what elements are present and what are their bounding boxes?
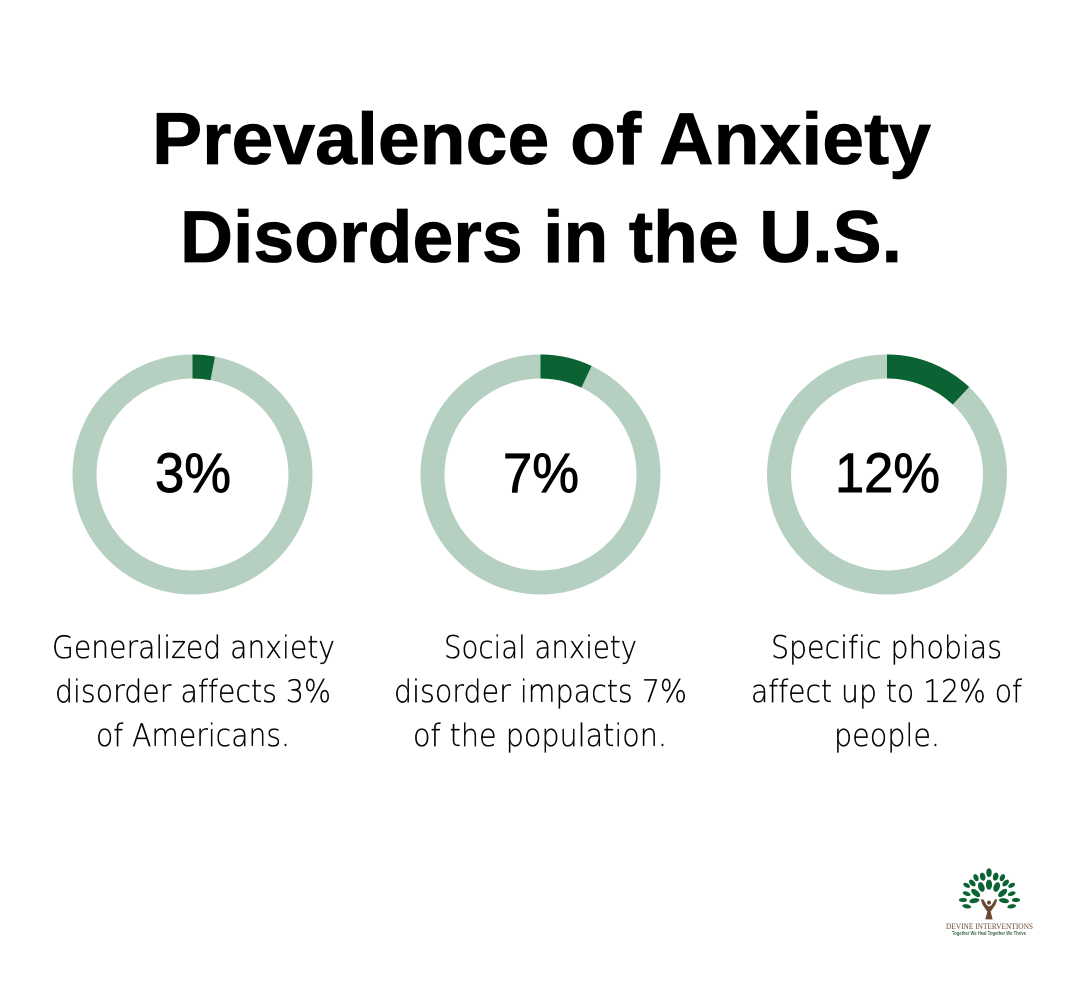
description: generalized anxiety disorder: of Americans.	[96, 718, 290, 754]
description: specific phobias	[751, 630, 1022, 754]
panel: specific phobias	[751, 366, 1022, 754]
title: Disorders in the U.S.	[180, 197, 902, 278]
donut chart: 7%	[432, 366, 648, 582]
donut chart: 12%: 12%	[835, 441, 940, 504]
donut chart: 3%	[84, 366, 300, 582]
title: Prevalence of Anxiety	[152, 99, 931, 180]
panel: social anxiety disorder	[394, 366, 687, 754]
donut chart: 7%: 7%	[503, 441, 579, 504]
description: social anxiety disorder: Social anxiety	[444, 630, 637, 666]
description: social anxiety disorder: disorder impacts 7%	[394, 674, 687, 710]
title	[152, 99, 931, 278]
logo wordmark: DEVINE INTERVENTIONS	[946, 922, 1033, 931]
description: specific phobias: people.	[834, 718, 940, 754]
donut chart: 3%: 3%	[155, 441, 231, 504]
description: generalized anxiety disorder: disorder affects 3%	[55, 674, 331, 710]
logo tagline: Together We Heal Together We Thrive	[952, 931, 1026, 937]
description: specific phobias: Specific phobias	[771, 630, 1002, 666]
description: specific phobias: affect up to 12% of	[751, 674, 1022, 710]
panel: generalized anxiety disorder	[52, 366, 335, 754]
description: social anxiety disorder: of the population.	[413, 718, 667, 754]
donut chart: 12%	[779, 366, 995, 582]
logo: Devine Interventions	[946, 868, 1033, 931]
description: generalized anxiety disorder	[52, 630, 335, 754]
description: generalized anxiety disorder: Generalized anxiety	[52, 630, 335, 666]
icon: tree	[959, 868, 1020, 919]
description: social anxiety disorder	[394, 630, 687, 754]
